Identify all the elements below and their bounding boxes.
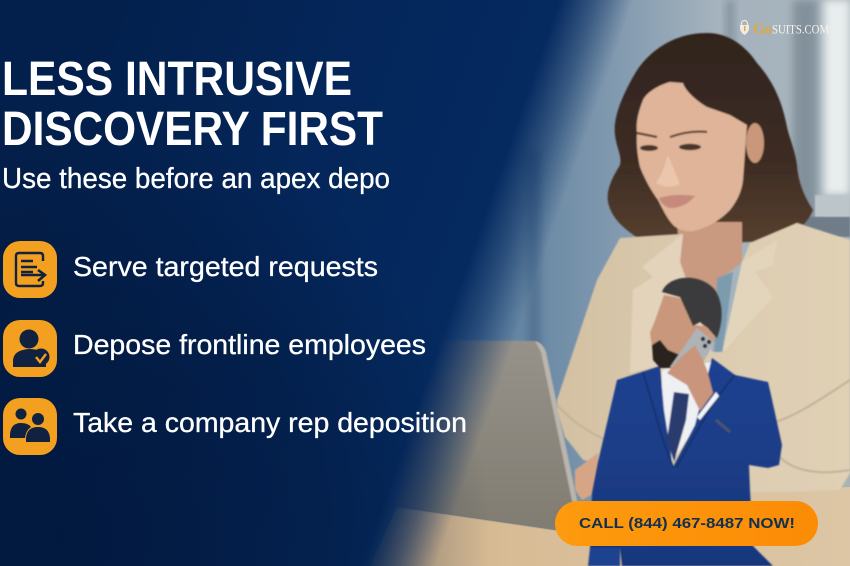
- icon: document with arrow: [3, 241, 57, 298]
- man's hair: [662, 278, 722, 338]
- woman's lips: [659, 195, 695, 208]
- woman's neck and chest: [677, 222, 742, 345]
- man's sleeve buttons: [716, 420, 730, 432]
- woman's ear: [746, 123, 764, 163]
- woman's blazer lapels: [630, 234, 712, 373]
- woman's nose shading: [656, 155, 680, 187]
- man's face: [650, 295, 708, 368]
- woman's eyes: [640, 144, 701, 151]
- logo: GoSuits.com: Go: [753, 21, 772, 38]
- man's phone: [670, 328, 715, 372]
- list item: depose frontline employees: [3, 320, 426, 377]
- list item: serve targeted requests: Serve targeted requests: [73, 251, 378, 282]
- man's hand: [667, 345, 713, 411]
- title: DISCOVERY FIRST: [2, 103, 383, 156]
- logo: GoSuits.com: [740, 20, 829, 38]
- photo: woman: [557, 33, 850, 500]
- call to action button: [555, 501, 818, 546]
- man in blue suit: [588, 278, 782, 566]
- subtitle: Use these before an apex depo: [2, 163, 390, 195]
- man's tie: [667, 392, 689, 462]
- man's left arm cuff: [588, 548, 620, 566]
- title: LESS INTRUSIVE: [2, 53, 352, 106]
- call to action button: CALL (844) 467-8487 NOW!: [579, 516, 795, 532]
- icon: two people: [3, 398, 57, 455]
- woman's face: [637, 82, 747, 231]
- list item: serve targeted requests: [3, 241, 378, 298]
- man's shirt: [662, 362, 712, 462]
- list item: take a company rep deposition: Take a company rep deposition: [73, 407, 467, 438]
- list item: depose frontline employees: Depose frontline employees: [73, 329, 426, 360]
- title: [2, 53, 383, 156]
- photo: wooden table: [370, 487, 850, 566]
- logo: GoSuits.com: SUITS.COM: [772, 22, 829, 36]
- icon: person with check badge: [3, 320, 57, 377]
- man's suit: [590, 358, 782, 566]
- woman's hand: [575, 453, 634, 500]
- man's lapels: [643, 372, 735, 468]
- man's beard: [652, 340, 680, 368]
- woman's hair: [608, 33, 813, 247]
- woman's blazer: [557, 223, 850, 493]
- list item: take a company rep deposition: [3, 398, 467, 455]
- man's shirt cuff: [697, 392, 719, 420]
- photo: laptop: [397, 340, 578, 530]
- icon: shield lock: [740, 20, 749, 35]
- woman's brows: [637, 132, 707, 137]
- woman's top: [714, 272, 733, 355]
